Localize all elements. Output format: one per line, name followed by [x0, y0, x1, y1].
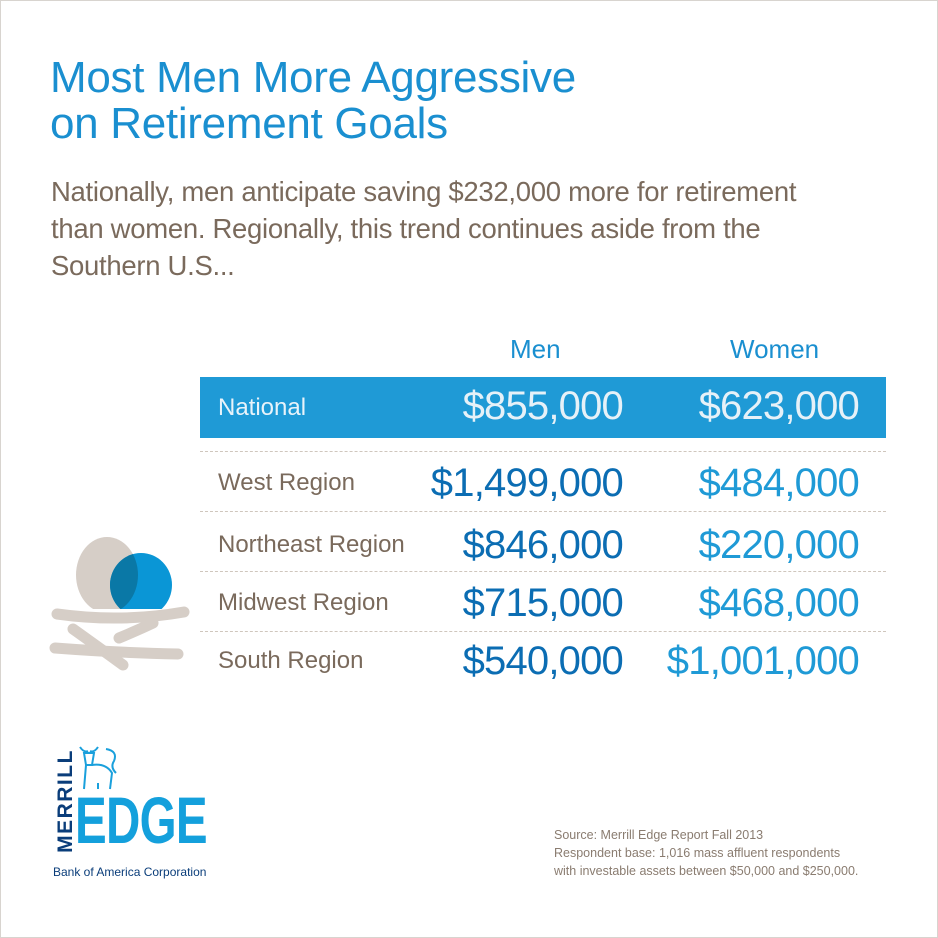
- national row: $623,000: [699, 384, 859, 428]
- subtitle: Nationally, men anticipate saving $232,000 more for retirement: [51, 176, 796, 207]
- header: men: Men: [510, 334, 561, 364]
- title: on Retirement Goals: [50, 99, 448, 148]
- national row: [200, 377, 886, 438]
- national row: National: [218, 394, 306, 421]
- logo: tagline: Bank of America Corporation: [53, 865, 206, 879]
- header: women: Women: [730, 334, 819, 364]
- row: northeast: $846,000: [463, 523, 623, 567]
- row: south: South Region: [218, 647, 363, 674]
- source note: Source: Merrill Edge Report Fall 2013: [554, 828, 763, 842]
- row: west: $484,000: [699, 461, 859, 505]
- title: Most Men More Aggressive: [50, 53, 576, 102]
- row: midwest: $468,000: [699, 581, 859, 625]
- logo: EDGE: EDGE: [75, 783, 207, 857]
- national row: $855,000: [463, 384, 623, 428]
- row: midwest: [218, 581, 859, 625]
- subtitle: [51, 176, 796, 281]
- title: [50, 53, 576, 148]
- row: west: West Region: [218, 469, 355, 496]
- row: midwest: $715,000: [463, 581, 623, 625]
- row: south: [218, 639, 859, 683]
- table: [200, 334, 886, 438]
- logo: [53, 746, 207, 879]
- logo: merrill vertical: MERRILL: [54, 749, 77, 853]
- row: south: $540,000: [463, 639, 623, 683]
- row: northeast: [218, 523, 859, 567]
- subtitle: than women. Regionally, this trend continues aside from the: [51, 213, 760, 244]
- source note: with investable assets between $50,000 and $250,000.: [554, 864, 858, 878]
- source note: Respondent base: 1,016 mass affluent respondents: [554, 846, 840, 860]
- logo: bull: [79, 746, 117, 790]
- row: west: [218, 461, 859, 505]
- row: northeast: Northeast Region: [218, 531, 405, 558]
- row: midwest: Midwest Region: [218, 589, 389, 616]
- icon: nest with eggs: [50, 537, 190, 670]
- row: west: $1,499,000: [431, 461, 623, 505]
- subtitle: Southern U.S...: [51, 250, 235, 281]
- row: south: $1,001,000: [667, 639, 859, 683]
- source note: [554, 828, 858, 878]
- row: northeast: $220,000: [699, 523, 859, 567]
